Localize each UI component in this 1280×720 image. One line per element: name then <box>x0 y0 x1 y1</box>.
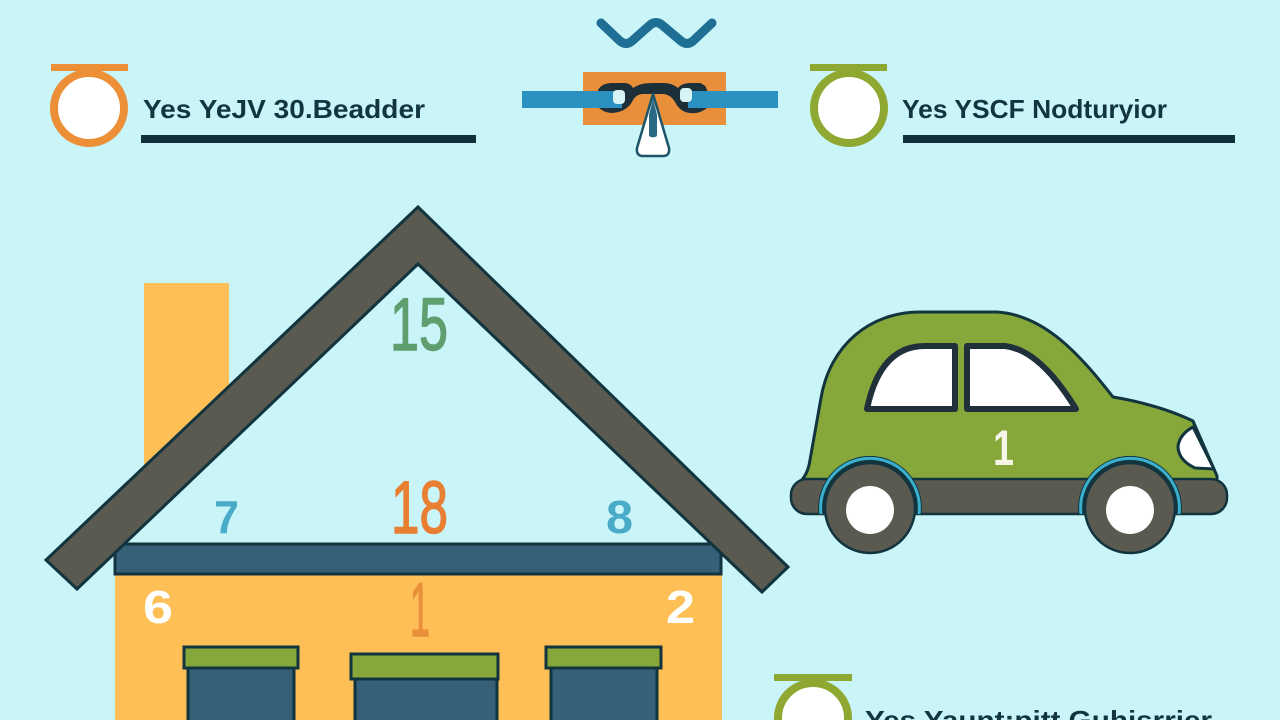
illustration: house: 1 <box>410 568 430 653</box>
footer item: bottom badge and label <box>774 674 1212 720</box>
icon: pendant core <box>649 98 657 138</box>
icon: left glint <box>613 90 625 104</box>
underline: right heading <box>903 135 1235 143</box>
rear window <box>867 346 955 409</box>
car body <box>800 312 1217 482</box>
underline: left heading <box>141 135 476 143</box>
illustration: car <box>791 312 1227 553</box>
window: middle <box>351 654 498 720</box>
icon: left blue bar <box>522 91 622 108</box>
header item: right badge and label <box>810 64 1235 143</box>
number: 2: 2 <box>666 581 695 633</box>
illustration: house <box>46 207 788 720</box>
number: 15: 15 <box>390 283 448 366</box>
icon: right blue bar <box>688 91 778 108</box>
icon: orange ring <box>51 64 128 143</box>
icon: pendant <box>637 94 669 156</box>
window: left <box>184 647 298 720</box>
icon: dark link <box>598 83 707 113</box>
header item: left badge and label <box>51 64 476 143</box>
icon: wave <box>601 22 712 44</box>
fascia band <box>115 544 721 574</box>
car sill <box>791 479 1227 514</box>
icon: wave and clasp <box>522 22 778 156</box>
label: left heading: Yes YeJV 30.Beadder <box>143 94 425 124</box>
number on car: 1 <box>993 420 1014 476</box>
icon: right glint <box>680 88 692 102</box>
icon: green ring <box>810 64 887 143</box>
icon: green ring <box>774 674 852 720</box>
chimney <box>144 283 229 480</box>
headlight <box>1178 427 1214 469</box>
number: 8: 8 <box>606 491 633 543</box>
number: 18: 18 <box>391 466 448 549</box>
front window <box>967 346 1076 409</box>
rear wheel <box>821 458 919 553</box>
roof <box>46 207 788 592</box>
front wheel <box>1081 458 1179 553</box>
icon: orange plate <box>583 72 726 125</box>
house wall <box>115 574 722 720</box>
number: 7: 7 <box>214 491 239 543</box>
number: 6: 6 <box>143 581 173 633</box>
label: right heading: Yes YSCF Nodturyior <box>902 94 1167 124</box>
window: right <box>546 647 661 720</box>
